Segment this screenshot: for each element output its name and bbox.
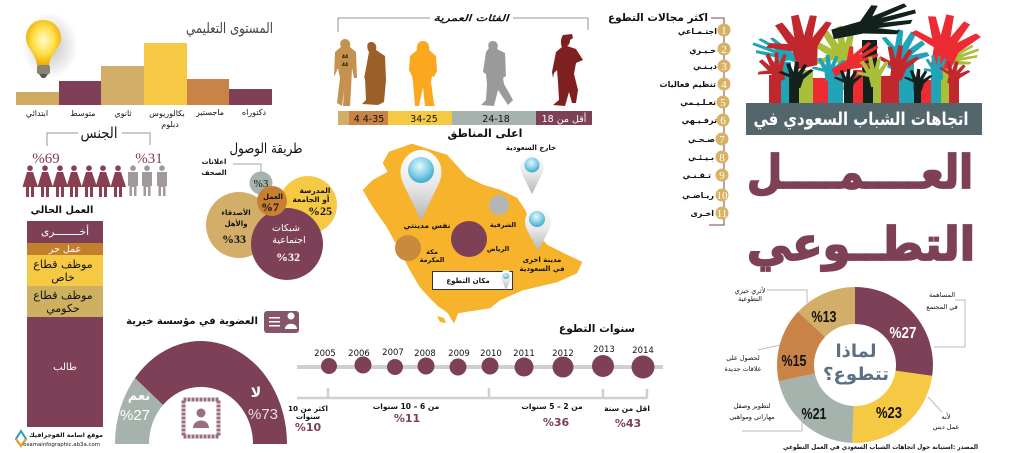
bar: age groups — [338, 111, 592, 125]
list: volunteering fields: 3 — [721, 61, 727, 73]
range: 2 to 5 years: من 2 – 5 سنوات — [521, 402, 583, 411]
donut chart: why volunteer: %27 — [890, 325, 917, 342]
venn: access method: شبكات — [272, 223, 300, 234]
range: over 10 years: %10 — [295, 421, 322, 434]
figure: age 35-44 — [334, 39, 357, 106]
venn: access method: الأصدقاء — [221, 208, 251, 217]
list: volunteering fields: تعـلـيـمي — [680, 98, 716, 107]
venn: access method: %7 — [261, 200, 279, 214]
heading: current job: العمل الحالي — [31, 205, 93, 216]
range: 6 to 10 years: من 6 – 10 سنوات — [373, 402, 440, 411]
pin: other Saudi city — [525, 207, 551, 251]
range: 2 to 5 years: %36 — [543, 416, 570, 429]
timeline: years: 2008 — [414, 349, 436, 359]
stacked bar: current job: موظف قطاع — [33, 258, 93, 271]
map: Saudi Arabia — [363, 144, 582, 323]
list: volunteering fields: 9 — [719, 170, 725, 182]
marker: Riyadh — [451, 221, 487, 257]
callout: skills development: مهاراتي ومواهبي — [729, 413, 775, 421]
venn: access method: %25 — [308, 204, 332, 218]
heading: access method: طريقة الوصول — [230, 141, 302, 157]
bar chart: education level: ماجستير — [195, 108, 224, 117]
list: volunteering fields: صـحـي — [688, 135, 715, 144]
donut chart: why volunteer: %23 — [876, 405, 902, 422]
callout: charity: التطوعية — [738, 295, 762, 303]
callout: religious duty — [928, 397, 959, 431]
source note: المصدر :استبانة حول اتجاهات الشباب السعودي في العمل التطوعي — [783, 444, 978, 451]
callout: religious duty: عمل ديني — [933, 423, 959, 431]
range: 6 to 10 years — [373, 402, 440, 425]
range: 6 to 10 years: %11 — [394, 412, 420, 425]
donut chart: why volunteer: %21 — [802, 406, 827, 423]
list: volunteering fields: اجتـمـاعي — [678, 27, 717, 36]
range: under a year: %43 — [615, 417, 641, 430]
bar chart: education level: ابتدائي — [26, 109, 48, 118]
list: volunteering fields — [660, 24, 730, 220]
figure: age 35-44: 44 — [342, 62, 348, 68]
bracket: year ranges — [297, 388, 647, 398]
bar: age groups: 34-25 — [410, 114, 438, 125]
callout: newspaper ads: اعلانات — [202, 158, 226, 166]
map: Saudi Arabia: نفس مدينتي — [404, 221, 451, 230]
timeline: years — [297, 345, 663, 378]
timeline: years: 2009 — [448, 349, 470, 359]
heading: age groups: الفئات العمرية — [434, 13, 511, 24]
logo: site credit — [16, 431, 103, 448]
icon: membership card — [264, 311, 299, 333]
range: over 10 years: سنوات — [296, 412, 320, 421]
callout: charity — [735, 286, 807, 303]
stacked bar: current job: عمل حر — [48, 244, 81, 255]
bar: age groups: 4 4-35 — [354, 114, 384, 125]
heading: top fields: اكثر مجالات التطوع — [608, 12, 708, 24]
heading: gender — [47, 124, 150, 146]
legend: volunteering place — [432, 270, 512, 290]
list: volunteering fields: ديـنـي — [693, 62, 717, 71]
pictogram: women — [22, 165, 126, 197]
gender percentages: %31 — [135, 151, 163, 167]
timeline: years: 2011 — [513, 349, 535, 359]
callout: skills development: لتطوير وصقل — [734, 402, 770, 410]
figure: age 18-24 — [481, 41, 513, 106]
callout: new relationships: علاقات جديدة — [724, 365, 762, 373]
stacked bar: current job: موظف قطاع — [33, 289, 93, 302]
bar chart: education level: بكالوريوس — [149, 109, 185, 118]
list: volunteering fields: تنظيم فعاليات — [660, 80, 716, 89]
range: under a year — [604, 404, 650, 430]
figure: age 35-44: 44 — [342, 54, 348, 60]
map: Saudi Arabia: الشرقية — [490, 221, 516, 229]
heading: years of volunteering: سنوات التطوع — [559, 322, 635, 335]
venn: access method: والأهل — [224, 219, 248, 228]
callout: skills development — [729, 402, 802, 431]
marker: Makkah — [395, 235, 421, 261]
heading: age groups — [338, 13, 588, 32]
stacked bar: current job: خاص — [51, 271, 75, 284]
title: education level: المستوى التعليمي — [186, 21, 273, 37]
bar: age groups: أقل من 18 — [542, 112, 587, 125]
stacked bar: current job: طالب — [53, 362, 77, 373]
callout: community contribution: المساهمة — [929, 291, 955, 299]
donut chart: why volunteer: تتطوع؟ — [823, 364, 889, 385]
figure: age 25-34 — [409, 41, 437, 106]
venn: access method: المدرسة — [300, 186, 330, 195]
pictogram: men — [128, 165, 167, 196]
gender percentages: %69 — [32, 151, 60, 167]
venn: access method: اجتماعية — [272, 235, 306, 246]
map: Saudi Arabia: الرياض — [487, 245, 509, 253]
list: volunteering fields: 5 — [720, 97, 726, 109]
timeline: years: 2013 — [593, 345, 615, 355]
callout: charity: لأثري خيري — [735, 286, 766, 295]
list: volunteering fields: 8 — [719, 152, 725, 164]
gauge: membership: نعم — [128, 389, 150, 404]
map: Saudi Arabia: مكة — [426, 248, 438, 256]
bar chart: education level: دبلوم — [161, 120, 179, 129]
timeline: years: 2014 — [632, 346, 654, 356]
gauge: membership — [115, 341, 287, 444]
gauge: membership: لا — [251, 385, 261, 401]
venn: access method — [206, 172, 337, 280]
banner: main title line: اتجاهات الشباب السعودي في — [754, 109, 968, 130]
list: volunteering fields: 10 — [716, 190, 728, 202]
title: volunteer work — [747, 145, 975, 271]
venn: access method: %3 — [254, 178, 269, 190]
title: volunteer work: التطــوعي — [747, 217, 975, 271]
venn: access method: %33 — [222, 232, 246, 246]
donut chart: why volunteer: لماذا — [836, 341, 876, 362]
callout: community contribution: في المجتمع — [926, 303, 958, 311]
heading: top regions: اعلى المناطق — [448, 127, 522, 140]
logo: site credit: موقع اسامة الفوجرافيك — [29, 432, 103, 439]
range: over 10 years — [288, 404, 328, 434]
list: volunteering fields: اخـرى — [690, 209, 714, 218]
timeline: years: 2006 — [348, 349, 370, 359]
range: under a year: اقل من سنة — [604, 404, 650, 413]
logo: site credit: osamainfographic.ab3a.com — [23, 442, 100, 448]
stacked bar: current job: أخــــــــرى — [41, 224, 89, 238]
heading: membership: العضوية في مؤسسة خيرية — [126, 316, 258, 327]
heading: gender: الجنس — [80, 124, 118, 142]
banner: main title line — [746, 103, 982, 135]
list: volunteering fields: 1 — [721, 25, 727, 37]
venn: access method: %32 — [276, 250, 300, 264]
list: volunteering fields: ترفـيـهي — [682, 116, 717, 125]
callout: new relationships: لحصول على — [726, 354, 760, 362]
list: volunteering fields: ريـاضـي — [682, 191, 714, 200]
donut chart: why volunteer: %13 — [812, 309, 837, 326]
timeline: years: 2010 — [480, 349, 502, 359]
bar chart: education level: متوسط — [70, 109, 96, 118]
stacked bar: current job: حكومي — [46, 302, 80, 315]
figure: robed man — [362, 42, 386, 105]
pin: own city — [401, 150, 441, 221]
timeline: years: 2007 — [382, 348, 404, 358]
list: volunteering fields: 4 — [721, 79, 727, 91]
venn: access method: أو الجامعة — [293, 194, 329, 204]
pin: outside Saudi — [506, 144, 556, 194]
marker: Eastern region — [489, 195, 509, 215]
title: volunteer work: العــــمــــل — [747, 145, 973, 199]
heading: top fields — [608, 12, 724, 225]
list: volunteering fields: 6 — [720, 115, 726, 127]
illustration: raised hands — [749, 0, 984, 103]
timeline: years: 2005 — [314, 349, 336, 359]
list: volunteering fields: خـيـري — [689, 46, 716, 55]
callout: new relationships — [724, 345, 780, 373]
legend: volunteering place: مكان التطوع — [446, 277, 490, 285]
list: volunteering fields: 11 — [717, 208, 727, 220]
callout: newspaper ads: الصحف — [201, 169, 227, 177]
range: 2 to 5 years — [521, 402, 583, 429]
gender percentages — [32, 151, 163, 167]
callout: religious duty: لأنه — [941, 412, 951, 421]
timeline: years: 2012 — [552, 349, 574, 359]
bar chart: education level — [16, 43, 272, 129]
bar chart: education level: ثانوي — [114, 109, 132, 118]
bar: age groups: 24-18 — [482, 114, 510, 125]
callout: community contribution — [926, 291, 965, 347]
list: volunteering fields: بـيـئـي — [688, 153, 714, 162]
gauge: membership: %27 — [120, 407, 150, 424]
gauge: membership: %73 — [248, 406, 278, 423]
range: over 10 years: اكثر من 10 — [288, 404, 328, 413]
map: Saudi Arabia: المكرمة — [420, 256, 444, 264]
map: Saudi Arabia: مدينة اخرى — [523, 256, 561, 264]
bar chart: education level: دكتوراه — [242, 108, 267, 117]
icon: light bulb — [22, 12, 78, 80]
list: volunteering fields: 7 — [719, 134, 725, 146]
list: volunteering fields: 2 — [721, 44, 727, 56]
list: volunteering fields: تـقـنـي — [683, 171, 711, 180]
donut chart: why volunteer — [777, 287, 933, 443]
figure: under 18 — [552, 34, 583, 106]
callout: newspaper ads — [201, 158, 261, 177]
icon: stamp portrait — [184, 400, 218, 436]
donut chart: why volunteer: %15 — [782, 353, 807, 370]
venn: access method: العمل — [263, 193, 283, 201]
map: Saudi Arabia: في السعودية — [519, 265, 565, 273]
stacked bar: current job — [27, 221, 103, 427]
pin: outside Saudi: خارج السعودية — [506, 144, 556, 152]
